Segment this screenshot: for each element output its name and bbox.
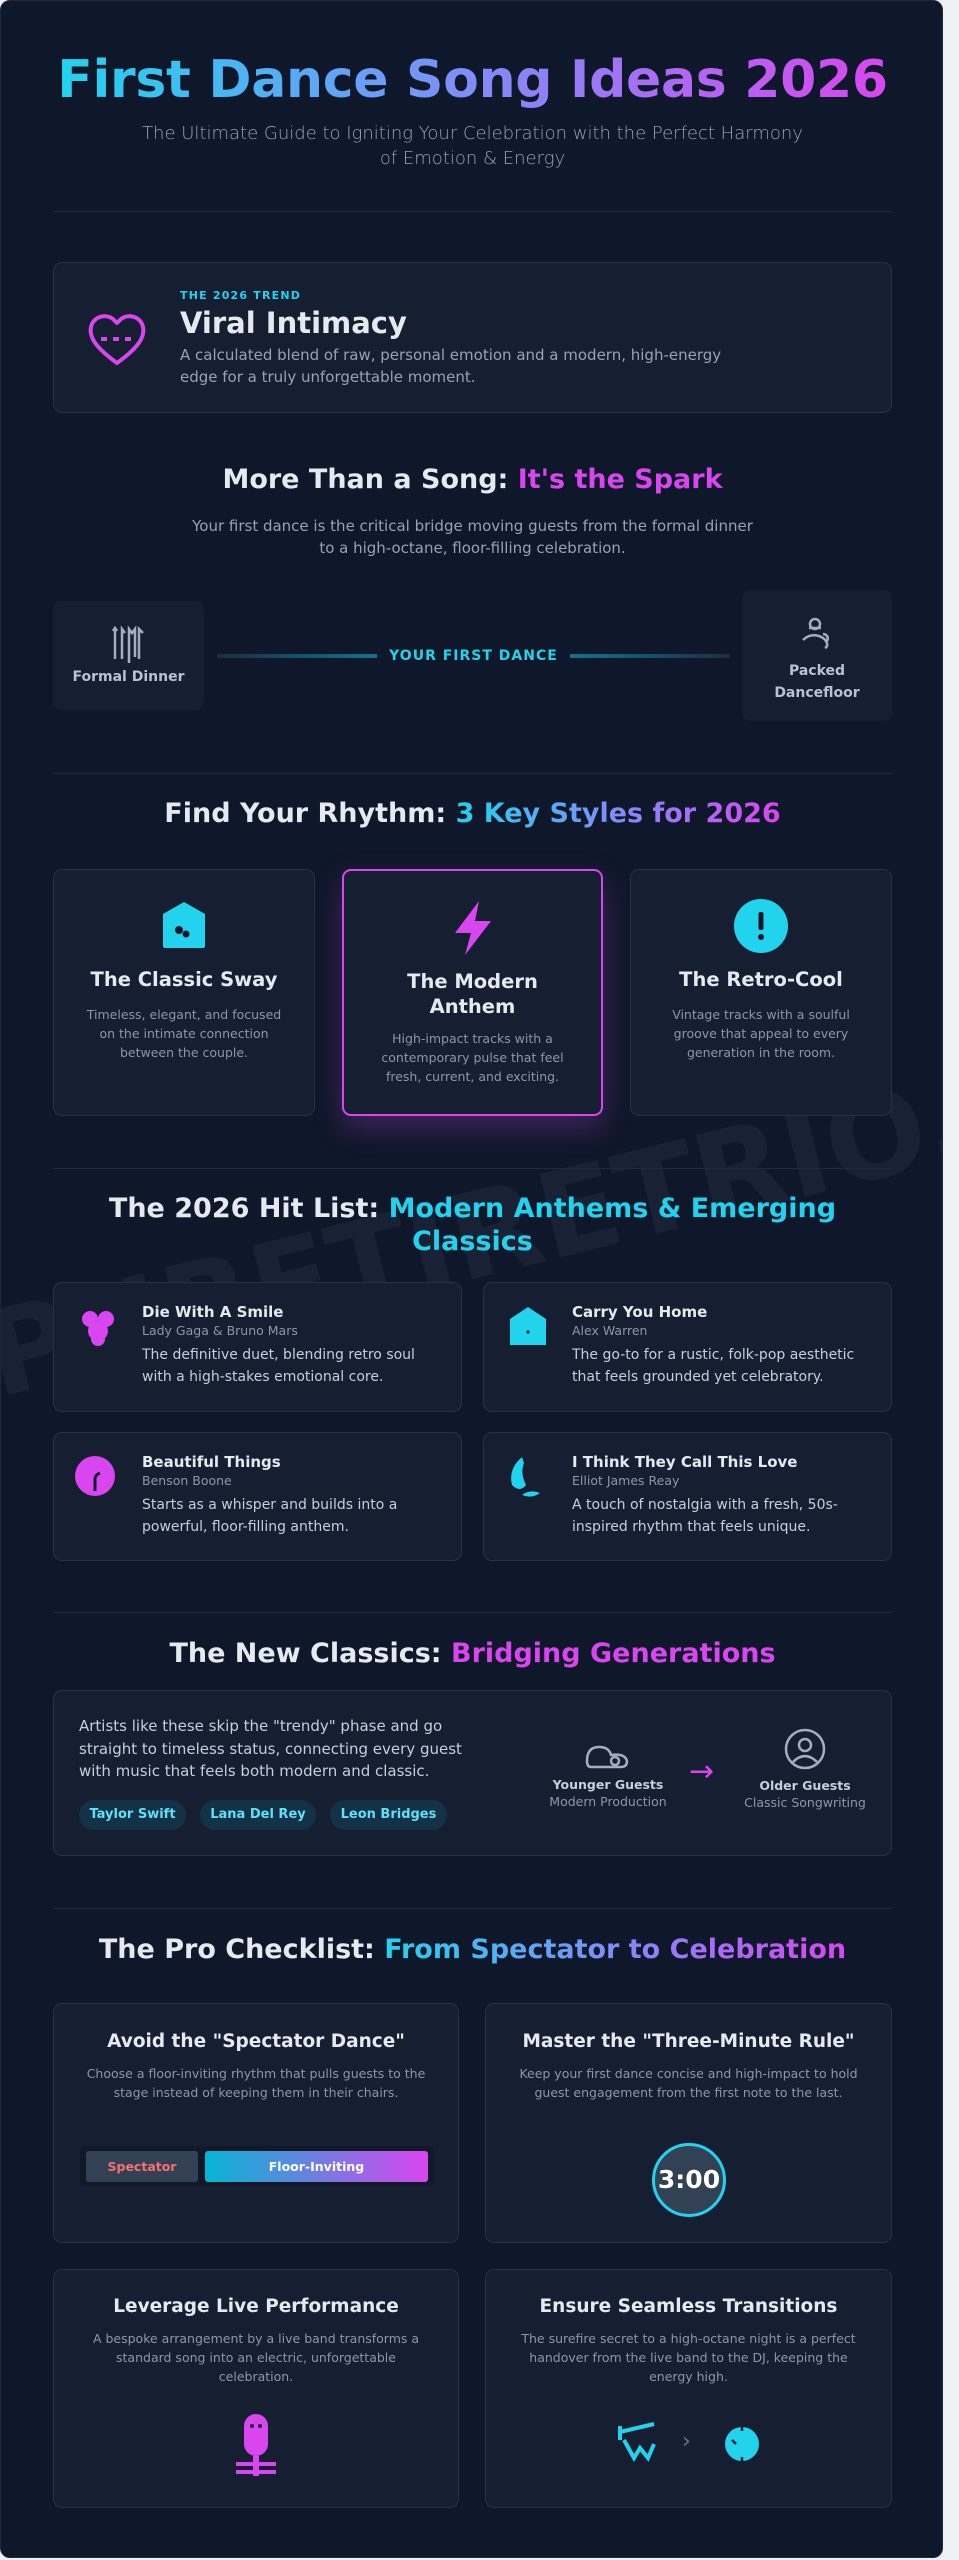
song: die with a smile (53, 1282, 462, 1412)
box: packed dancefloor (742, 590, 892, 721)
card: three-minute rule (485, 2003, 892, 2243)
box: formal dinner: Formal Dinner (72, 669, 184, 685)
card: avoid spectator dance: Avoid the "Spectator Dance" (107, 2031, 405, 2052)
card: seamless transitions: The surefire secret to a high-octane night is a perfect handover from the live band to the DJ, keeping the energy high. (521, 2331, 856, 2384)
song: beautiful things: Beautiful Things (142, 1453, 281, 1471)
icon: pink circle (75, 1456, 115, 1496)
icon: 3:00 clock: 3:00 (658, 2165, 720, 2194)
arrow: your first dance: YOUR FIRST DANCE (389, 648, 558, 664)
card: live performance: Leverage Live Performance (113, 2296, 399, 2317)
card: modern anthem (highlighted): High-impact tracks with a contemporary pulse that feel fresh, current, and exciting. (381, 1031, 564, 1084)
song: carry you home: The go-to for a rustic, folk-pop aesthetic that feels grounded yet celebratory. (572, 1347, 854, 1385)
trend text: A calculated blend of raw, personal emotion and a modern, high-energy (180, 346, 721, 364)
icon group: older guests: Classic Songwriting (744, 1795, 866, 1810)
box: packed dancefloor: Packed (789, 663, 845, 679)
box: packed dancefloor: Dancefloor (774, 685, 860, 701)
chart: spectator vs floor-inviting bar: Spectator (108, 2159, 176, 2174)
pill: taylor swift (79, 1800, 186, 1830)
arrow: your first dance (217, 648, 730, 664)
song: carry you home (483, 1282, 892, 1412)
icon: microphone (236, 2414, 276, 2476)
card: live performance: A bespoke arrangement by a live band transforms a standard song into an electric, unforgettable celebration. (93, 2331, 419, 2384)
heading: find your rhythm: Find Your Rhythm: 3 Key Styles for 2026 (164, 798, 781, 829)
icon group: younger guests: Younger Guests (553, 1777, 663, 1792)
card: retro-cool: Vintage tracks with a soulful groove that appeal to every generation in the room. (672, 1007, 850, 1060)
subtitle: of Emotion & Energy (380, 148, 565, 169)
pill: leon bridges: Leon Bridges (341, 1807, 436, 1822)
icon: exclamation circle (734, 899, 788, 953)
song: beautiful things: Benson Boone (142, 1473, 232, 1488)
icon: leaf (511, 1457, 540, 1497)
pill: lana del rey: Lana Del Rey (210, 1807, 306, 1822)
pill: taylor swift: Taylor Swift (89, 1807, 176, 1822)
song: carry you home: Alex Warren (572, 1323, 647, 1338)
song: i think they call this love: A touch of nostalgia with a fresh, 50s-inspired rhythm that feels unique. (572, 1497, 838, 1535)
card: retro-cool (630, 869, 892, 1116)
card: modern anthem (highlighted) (342, 869, 603, 1116)
heading: pro checklist: The Pro Checklist: From Spectator to Celebration (99, 1934, 846, 1965)
panel: trend card (53, 262, 892, 413)
chart: spectator vs floor-inviting bar: Floor-Inviting (269, 2159, 364, 2174)
icon: flower pink (82, 1311, 114, 1346)
icon: dinner (112, 625, 144, 663)
icon: 3:00 clock (652, 2143, 726, 2217)
song: beautiful things (53, 1432, 462, 1561)
card: three-minute rule: Keep your first dance concise and high-impact to hold guest engagement from the first note to the last. (519, 2066, 858, 2100)
chart: spectator vs floor-inviting bar (80, 2146, 434, 2186)
song: carry you home: Carry You Home (572, 1303, 707, 1321)
song: beautiful things: Starts as a whisper and builds into a powerful, floor-filling anthem. (142, 1497, 397, 1535)
icon: dancers (802, 618, 830, 650)
heading: more than a song: More Than a Song: It's the Spark (222, 464, 723, 495)
song: die with a smile: Lady Gaga & Bruno Mars (142, 1323, 298, 1338)
text: artists description: Artists like these skip the "trendy" phase and go (79, 1717, 442, 1735)
panel: new classics card (53, 1690, 892, 1856)
card: avoid spectator dance (53, 2003, 459, 2243)
heading: hit list: The 2026 Hit List: Modern Anthems & Emerging Classics (109, 1193, 836, 1257)
text: artists description (79, 1717, 462, 1780)
trend text: Viral Intimacy (180, 306, 407, 340)
text: artists description: with music that feels both modern and classic. (79, 1762, 429, 1780)
text: bridge description (192, 517, 753, 557)
card: modern anthem (highlighted): Anthem (430, 995, 515, 1018)
card: seamless transitions: Ensure Seamless Transitions (540, 2296, 837, 2317)
song: i think they call this love: Elliot James Reay (572, 1473, 679, 1488)
trend text (180, 289, 721, 386)
card: modern anthem (highlighted): The Modern (407, 970, 538, 993)
song: i think they call this love: I Think They Call This Love (572, 1453, 797, 1471)
subtitle (142, 123, 803, 169)
card: live performance (53, 2269, 459, 2508)
pill: lana del rey (200, 1800, 316, 1830)
text: artists description: straight to timeless status, connecting every guest (79, 1740, 462, 1758)
trend text: THE 2026 TREND (180, 289, 301, 302)
card: three-minute rule: Master the "Three-Minute Rule" (522, 2031, 855, 2052)
card: seamless transitions (485, 2269, 892, 2508)
icon: house (510, 1307, 546, 1345)
song: die with a smile: The definitive duet, blending retro soul with a high-stakes emotional core. (142, 1347, 415, 1385)
heading: new classics: The New Classics: Bridging Generations (169, 1638, 776, 1669)
icon group: older guests (744, 1728, 866, 1810)
card: classic sway (53, 869, 315, 1116)
trend text: edge for a truly unforgettable moment. (180, 368, 476, 386)
icon group: younger guests (549, 1746, 667, 1809)
icon: band to dj: › (682, 2429, 691, 2454)
song: i think they call this love (483, 1432, 892, 1561)
card: retro-cool: The Retro-Cool (679, 968, 843, 991)
arrow: younger to older: → (689, 1754, 714, 1789)
icon: lightning (455, 901, 491, 955)
icon group: younger guests: Modern Production (549, 1794, 667, 1809)
pill: leon bridges (330, 1800, 447, 1830)
box: formal dinner (53, 601, 204, 710)
card: avoid spectator dance: Choose a floor-inviting rhythm that pulls guests to the stage instead of keeping them in their chairs. (87, 2066, 425, 2100)
icon: house cyan (163, 902, 205, 948)
icon group: older guests: Older Guests (759, 1778, 851, 1793)
subtitle: The Ultimate Guide to Igniting Your Celebration with the Perfect Harmony (142, 123, 803, 144)
card: classic sway: The Classic Sway (91, 968, 277, 991)
icon: band to dj (618, 2422, 759, 2462)
card: classic sway: Timeless, elegant, and focused on the intimate connection between the couple. (87, 1007, 281, 1060)
icon: heart (88, 314, 146, 365)
song: die with a smile: Die With A Smile (142, 1303, 283, 1321)
title: First Dance Song Ideas 2026 (57, 50, 888, 110)
text: bridge description: to a high-octane, floor-filling celebration. (319, 539, 626, 557)
text: bridge description: Your first dance is the critical bridge moving guests from the formal dinner (192, 517, 753, 535)
